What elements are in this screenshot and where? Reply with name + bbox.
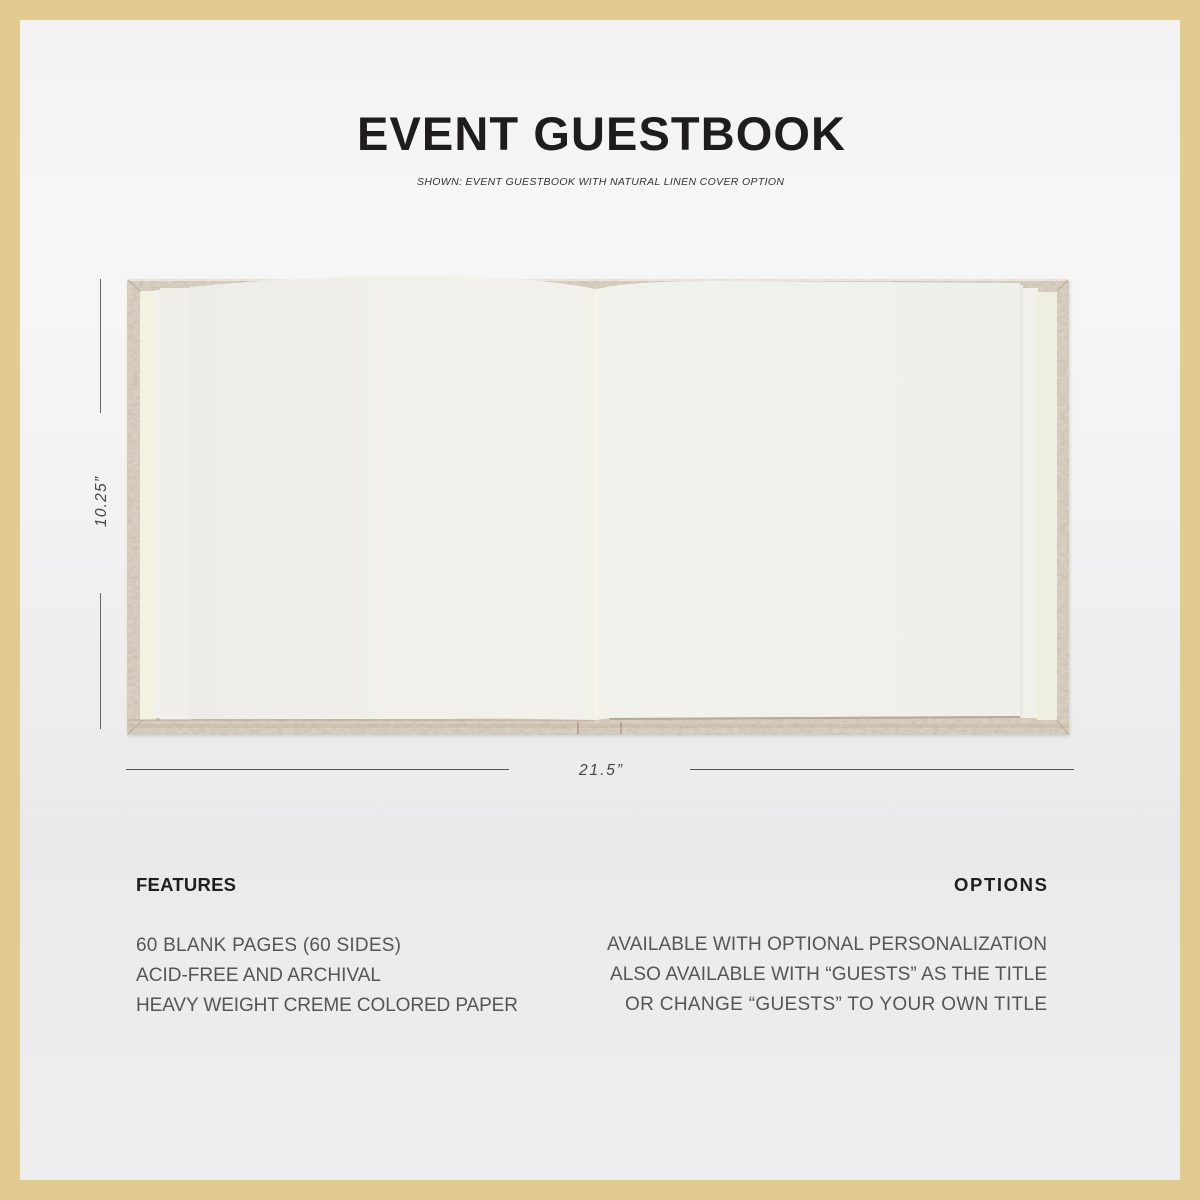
features heading: FEATURES [136, 874, 236, 895]
options list: AVAILABLE WITH OPTIONAL PERSONALIZATION [607, 934, 1047, 955]
options list: ALSO AVAILABLE WITH “GUESTS” AS THE TITLE [610, 964, 1047, 985]
title: EVENT GUESTBOOK [357, 107, 845, 160]
subtitle: SHOWN: EVENT GUESTBOOK WITH NATURAL LINEN COVER OPTION [417, 176, 784, 188]
corner folds [128, 280, 1068, 734]
features list: 60 BLANK PAGES (60 SIDES) [136, 935, 401, 956]
width dimension: 21.5 in: 21.5” [578, 762, 623, 779]
open book [127, 276, 1070, 737]
linen cover [127, 279, 1069, 735]
page edge shadows [127, 719, 595, 721]
spine hinges [578, 722, 621, 734]
gutter [595, 289, 597, 720]
book shadow [128, 281, 1070, 737]
right page stack [1020, 285, 1057, 720]
features block [136, 874, 518, 1016]
options block [607, 874, 1047, 1015]
options heading: OPTIONS [954, 874, 1047, 895]
options list: OR CHANGE “GUESTS” TO YOUR OWN TITLE [625, 994, 1047, 1015]
options list [607, 934, 1047, 1015]
right page [596, 281, 1020, 720]
features list: ACID-FREE AND ARCHIVAL [136, 965, 381, 986]
left page stack [140, 288, 192, 720]
height dimension: 10.25 in: 10.25” [93, 476, 110, 527]
features list: HEAVY WEIGHT CREME COLORED PAPER [136, 995, 518, 1016]
features list [136, 935, 518, 1016]
left page [190, 276, 595, 720]
